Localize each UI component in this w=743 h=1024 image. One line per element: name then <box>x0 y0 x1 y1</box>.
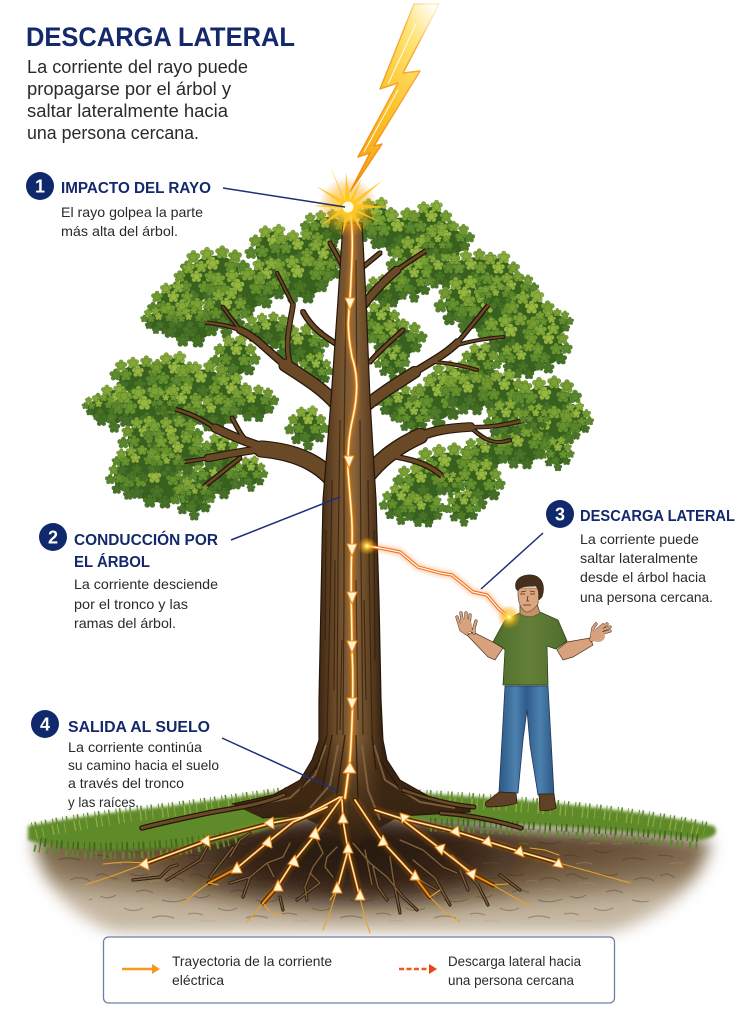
step 3: descarga lateral: saltar lateralmente <box>580 550 698 566</box>
person: jeans <box>499 686 554 795</box>
lateral discharge <box>358 537 521 629</box>
surface roots <box>142 790 521 828</box>
impact burst <box>312 165 390 237</box>
intro text: propagarse por el árbol y <box>27 79 231 99</box>
legend: current label: eléctrica <box>172 972 224 988</box>
person: boots <box>485 792 556 811</box>
step 1: impacto del rayo: IMPACTO DEL RAYO <box>61 180 211 197</box>
intro text: La corriente del rayo puede <box>27 57 248 77</box>
step 1: impacto del rayo: El rayo golpea la parte <box>61 204 203 220</box>
intro text <box>27 57 248 143</box>
step 4: salida al suelo: a través del tronco <box>68 775 184 791</box>
person: right arm and hand <box>557 624 610 660</box>
grass band <box>28 790 716 856</box>
step 3: descarga lateral <box>481 500 735 605</box>
step 3: descarga lateral: una persona cercana. <box>580 589 713 605</box>
lightning bolt <box>350 4 439 192</box>
intro text: saltar lateralmente hacia <box>27 101 229 121</box>
step 2: conducción por el árbol: 2 <box>48 528 58 548</box>
legend: current label: Trayectoria de la corriente <box>172 953 332 969</box>
current path: roots <box>85 797 630 933</box>
step 2: conducción por el árbol: EL ÁRBOL <box>74 552 150 571</box>
step 2: conducción por el árbol <box>39 497 340 631</box>
legend: lateral label: una persona cercana <box>448 972 574 988</box>
title: DESCARGA LATERAL <box>26 22 295 52</box>
step 3: descarga lateral: 3 <box>555 504 565 524</box>
step 4: salida al suelo: y las raíces. <box>68 794 139 810</box>
step 2: conducción por el árbol: La corriente desciende <box>74 576 218 592</box>
intro text: una persona cercana. <box>27 123 199 143</box>
soil cross-section <box>34 794 710 932</box>
person: shirt <box>493 612 567 685</box>
step 1: impacto del rayo: más alta del árbol. <box>61 223 178 239</box>
step 1: impacto del rayo <box>26 172 345 239</box>
foliage over branch tips <box>151 229 550 505</box>
legend: current arrow <box>122 964 160 974</box>
step 4: salida al suelo: 4 <box>40 714 50 734</box>
step 1: impacto del rayo: 1 <box>35 176 45 196</box>
person: left arm and hand <box>457 613 503 660</box>
step 2: conducción por el árbol: ramas del árbol. <box>74 615 176 631</box>
step 4: salida al suelo: su camino hacia el suelo <box>68 757 219 773</box>
branches <box>170 243 525 490</box>
person <box>457 575 610 811</box>
person: neck and head <box>515 575 544 617</box>
step 4: salida al suelo <box>31 710 336 810</box>
trunk root flare <box>232 735 470 850</box>
step 2: conducción por el árbol: CONDUCCIÓN POR <box>74 530 218 549</box>
step 3: descarga lateral: La corriente puede <box>580 531 699 547</box>
step 3: descarga lateral: desde el árbol hacia <box>580 569 706 585</box>
trunk <box>319 223 383 742</box>
legend: lateral label <box>448 953 581 988</box>
legend: lateral arrow <box>399 964 437 974</box>
step 4: salida al suelo: SALIDA AL SUELO <box>68 719 210 736</box>
foliage <box>82 197 594 527</box>
step 2: conducción por el árbol: por el tronco y las <box>74 596 188 612</box>
step 4: salida al suelo: La corriente continúa <box>68 739 202 755</box>
legend <box>104 937 614 1003</box>
current path: trunk <box>343 210 357 798</box>
legend: current label <box>172 953 332 988</box>
legend: lateral label: Descarga lateral hacia <box>448 953 581 969</box>
underground roots <box>133 797 559 913</box>
